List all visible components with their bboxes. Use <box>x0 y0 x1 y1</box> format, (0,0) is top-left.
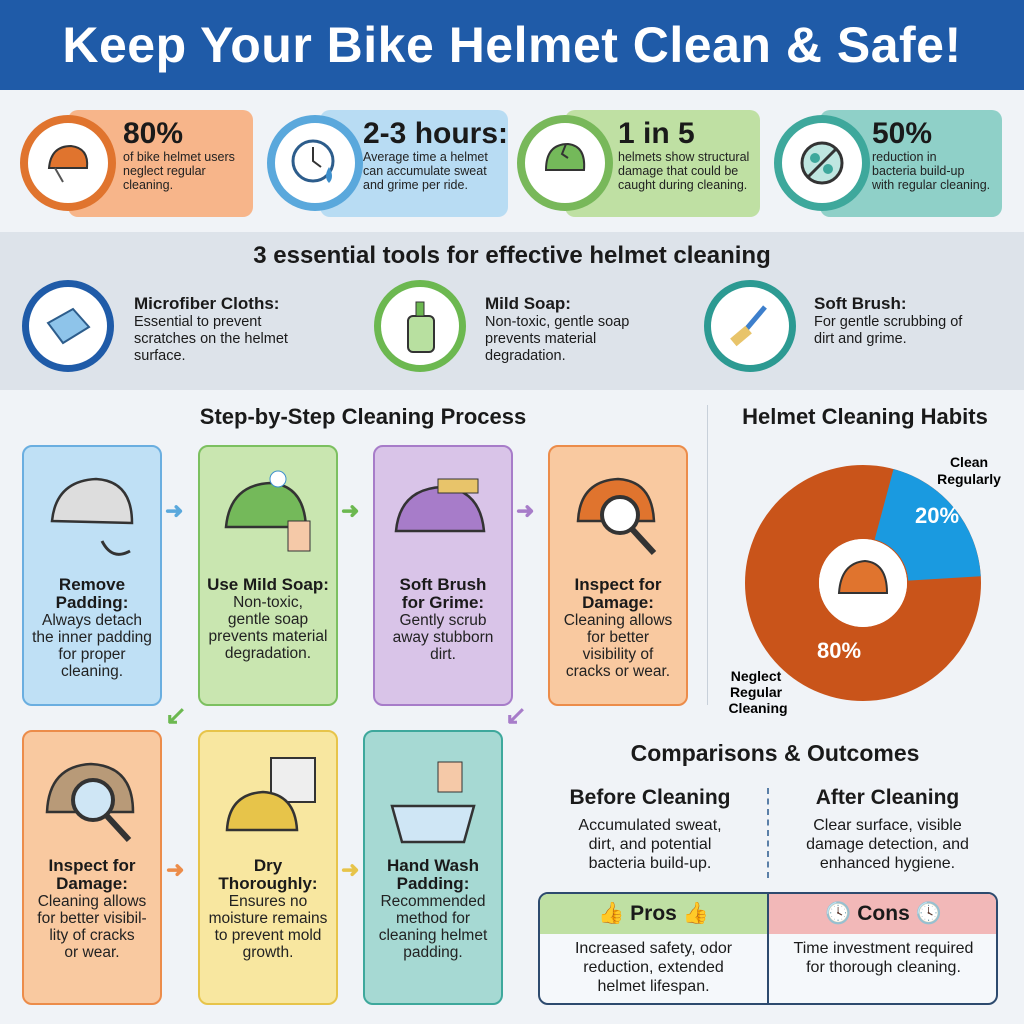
tool: soft brush <box>704 280 962 372</box>
step 5: Damage: <box>56 874 128 893</box>
step 5: Cleaning allows <box>38 893 146 910</box>
stat: 80%: 80% <box>123 117 183 150</box>
donut chart: Regularly <box>937 471 1001 487</box>
tool: mild soap <box>374 280 629 372</box>
stat: 80% <box>20 110 253 217</box>
arrow 1: ➜ <box>165 498 183 523</box>
cons: Time investment required <box>794 940 973 957</box>
stat: 2-3 hours: and grime per ride. <box>363 178 468 192</box>
stat: 50%: with regular cleaning. <box>872 178 990 192</box>
before cleaning: bacteria build-up. <box>589 855 711 872</box>
step 2: gentle soap <box>228 611 308 628</box>
step 3: Gently scrub <box>399 612 486 629</box>
tool: microfiber <box>22 280 288 372</box>
step 3: away stubborn <box>393 629 493 646</box>
donut chart: 80% <box>817 638 861 663</box>
pros <box>540 894 769 1005</box>
step 3: for Grime: <box>402 593 484 612</box>
stat: 2-3 hours: 2-3 hours: <box>363 117 508 150</box>
step 5: or wear. <box>64 944 120 961</box>
after cleaning: enhanced hygiene. <box>820 855 955 872</box>
comparisons heading: Comparisons & Outcomes <box>631 740 919 766</box>
before cleaning: Accumulated sweat, <box>578 817 722 834</box>
step 7 <box>363 730 503 1005</box>
step 2: Use Mild Soap: <box>207 575 329 594</box>
step 6: Thoroughly: <box>218 874 318 893</box>
step 6: Ensures no <box>229 893 307 910</box>
stat: 80%: cleaning. <box>123 178 173 192</box>
before cleaning <box>569 786 731 872</box>
tool: microfiber: Microfiber Cloths: <box>134 294 279 313</box>
donut chart: Regular <box>730 684 783 700</box>
stat: 50%: bacteria build-up <box>872 164 964 178</box>
stat: 1 in 5: 1 in 5 <box>618 117 695 150</box>
stat: 1 in 5: damage that could be <box>618 164 738 178</box>
step 7: Hand Wash <box>387 856 479 875</box>
step 1: the inner padding <box>32 629 152 646</box>
after cleaning: Clear surface, visible <box>813 817 962 834</box>
stat: 1 in 5: helmets show structural <box>618 150 749 164</box>
tool: mild soap: degradation. <box>485 348 566 364</box>
step 7: Recommended <box>380 893 486 910</box>
step 7: padding. <box>403 944 463 961</box>
step 1: Padding: <box>56 593 128 612</box>
donut chart <box>728 454 1001 716</box>
step 5: Inspect for <box>49 856 135 875</box>
arrow 3: ➜ <box>516 498 534 523</box>
step 4: for better <box>587 629 649 646</box>
donut chart: Cleaning <box>728 700 788 716</box>
tool: mild soap: Non-toxic, gentle soap <box>485 314 629 330</box>
step 1: cleaning. <box>61 663 123 680</box>
step 2: Non-toxic, <box>233 594 303 611</box>
cons: for thorough cleaning. <box>806 959 961 976</box>
pros: reduction, extended <box>583 959 724 976</box>
tool: microfiber: scratches on the helmet <box>134 331 288 347</box>
steps heading: Step-by-Step Cleaning Process <box>200 404 526 429</box>
step 7: cleaning helmet <box>379 927 487 944</box>
tool: mild soap: prevents material <box>485 331 596 347</box>
step 4: Inspect for <box>575 575 661 594</box>
step 3: Soft Brush <box>400 575 486 594</box>
tool: mild soap: Mild Soap: <box>485 294 571 313</box>
stat: 80%: of bike helmet users <box>123 150 235 164</box>
tool: soft brush: Soft Brush: <box>814 294 907 313</box>
stat: 2-3 hours: Average time a helmet <box>363 150 488 164</box>
step 3 <box>373 445 513 706</box>
step 1: for proper <box>58 646 126 663</box>
step 2 <box>198 445 338 706</box>
step 6: moisture remains <box>209 910 327 927</box>
pros: helmet lifespan. <box>597 978 710 995</box>
stat: 80%: neglect regular <box>123 164 206 178</box>
stat: 1 in 5: caught during cleaning. <box>618 178 747 192</box>
step 6 <box>198 730 338 1005</box>
step 7: Padding: <box>397 874 469 893</box>
step 2: degradation. <box>225 645 311 662</box>
arrow 5: ➜ <box>166 857 184 882</box>
step 5: lity of cracks <box>49 927 135 944</box>
arrow 2: ➜ <box>341 498 359 523</box>
title banner <box>0 0 1024 90</box>
step 4: Cleaning allows <box>564 612 672 629</box>
step 7: method for <box>396 910 470 927</box>
after cleaning: After Cleaning <box>816 786 959 809</box>
panel: tools <box>0 232 1024 390</box>
arrow 6: ➜ <box>341 857 359 882</box>
tool: microfiber: Essential to prevent <box>134 314 261 330</box>
step 6: growth. <box>243 944 293 961</box>
cons <box>769 894 996 976</box>
pros cons table <box>538 892 998 1005</box>
donut chart: 20% <box>915 503 959 528</box>
stat: 50%: reduction in <box>872 150 937 164</box>
stat: 2-3 hours <box>267 110 508 217</box>
step 4: Damage: <box>582 593 654 612</box>
after cleaning <box>806 786 969 872</box>
before cleaning: Before Cleaning <box>569 786 731 809</box>
step 2: prevents material <box>209 628 327 645</box>
arrow down-left 2: ↙ <box>505 700 527 730</box>
step 6: to prevent mold <box>215 927 321 944</box>
pros: 👍 Pros 👍 <box>598 902 709 925</box>
cons: 🕓 Cons 🕓 <box>825 902 942 925</box>
stat: 2-3 hours: can accumulate sweat <box>363 164 487 178</box>
tool: soft brush: For gentle scrubbing of <box>814 314 962 330</box>
pros: Increased safety, odor <box>575 940 732 957</box>
step 4: cracks or wear. <box>566 663 670 680</box>
tools heading: 3 essential tools for effective helmet cleaning <box>253 242 771 269</box>
donut chart: Neglect <box>731 668 782 684</box>
after cleaning: damage detection, and <box>806 836 969 853</box>
before cleaning: dirt, and potential <box>589 836 711 853</box>
step 3: dirt. <box>430 646 456 663</box>
stat: 50%: 50% <box>872 117 932 150</box>
step 1: Remove <box>59 575 125 594</box>
step 5: for better visibil- <box>37 910 147 927</box>
arrow down-left 1: ↙ <box>165 700 187 730</box>
stat: 1 in 5 <box>517 110 760 217</box>
title banner: Keep Your Bike Helmet Clean & Safe! <box>62 17 962 73</box>
step 1 <box>22 445 162 706</box>
step 4 <box>548 445 688 706</box>
tool: microfiber: surface. <box>134 348 186 364</box>
stat: 50% <box>774 110 1002 217</box>
step 4: visibility of <box>583 646 653 663</box>
step 1: Always detach <box>42 612 142 629</box>
donut chart: Clean <box>950 454 988 470</box>
step 6: Dry <box>254 856 282 875</box>
tool: soft brush: dirt and grime. <box>814 331 907 347</box>
habits heading: Helmet Cleaning Habits <box>742 404 988 429</box>
step 5 <box>22 730 162 1005</box>
